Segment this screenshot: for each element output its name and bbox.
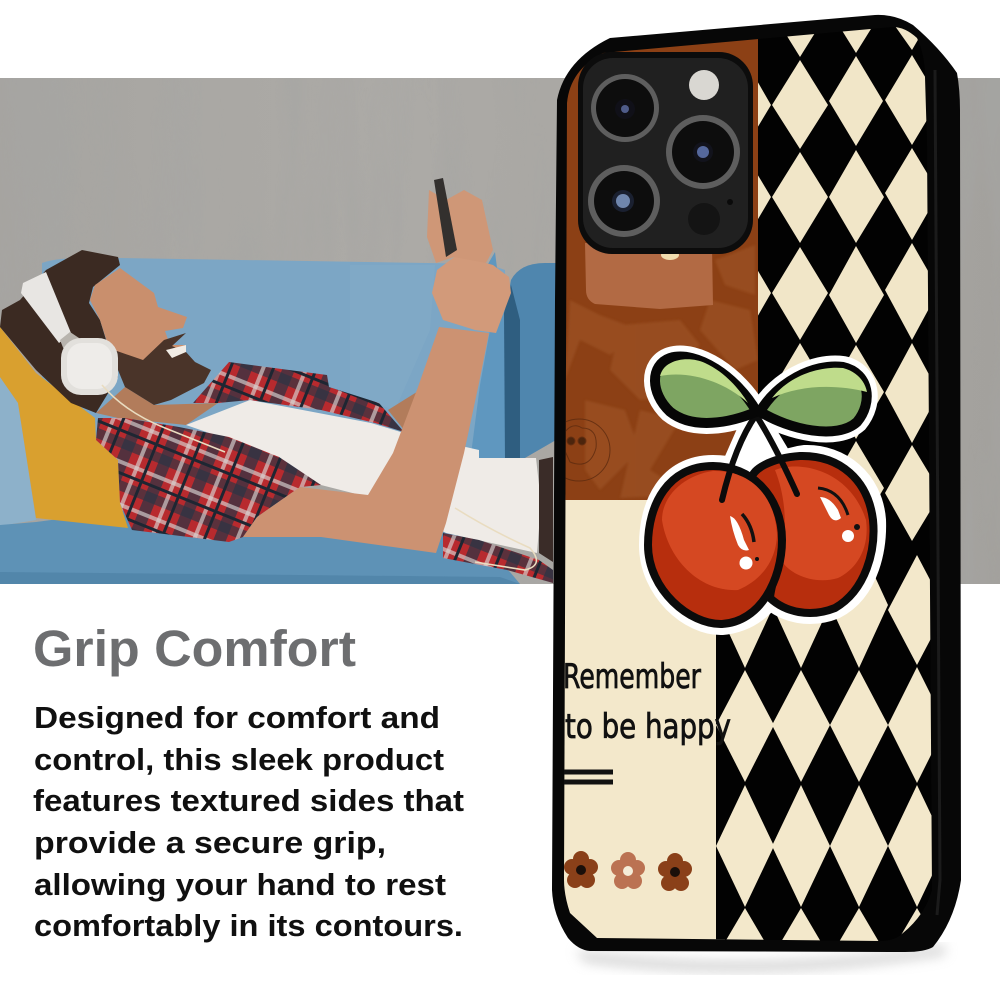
microphone [727,199,733,205]
lens right [666,115,740,189]
white t-shirt [186,400,541,553]
flowers [564,851,692,891]
body text: Designed for comfort and [34,700,440,735]
lens bottom left [588,165,660,237]
jeans [539,457,553,562]
neck [96,387,218,425]
wall background [0,78,1000,584]
white sticker outline [650,357,875,624]
body text: control, this sleek product [34,742,444,777]
stamp [566,418,610,482]
stems [722,415,797,500]
yellow pillow [0,327,128,528]
slogan: Remember [563,657,701,697]
lens top left [591,74,659,142]
flower middle [611,852,645,889]
flash [689,70,719,100]
right cherry [752,456,874,613]
slogan: to be happy [565,707,731,747]
beard [114,333,211,405]
tan patch [585,243,713,309]
case body [552,15,961,952]
flower left [564,851,598,888]
cherry illustration [648,357,875,624]
double line [564,770,613,784]
phone case [548,0,961,952]
body text: provide a secure grip, [34,825,386,860]
slogan [563,657,731,747]
body text: allowing your hand to rest [34,867,446,902]
hair [0,250,120,413]
sofa [0,252,556,584]
brown panel [560,30,758,500]
plaid shirt [96,362,553,583]
tan patch tooth [661,254,679,260]
phone shadow [575,945,945,972]
body text [33,700,464,943]
small phone [434,178,457,257]
left leaf [655,357,757,423]
far elbow [388,390,420,430]
flower right [658,853,692,891]
camera module [578,52,753,254]
smile [166,345,186,358]
arm [243,327,489,553]
right leaf [760,366,867,431]
heading: Grip Comfort [33,620,356,677]
body text: comfortably in its contours. [34,908,463,943]
body text: features textured sides that [33,783,464,818]
cream background [555,490,725,950]
harlequin pattern top [758,27,930,541]
earphone cable [102,385,536,570]
photo: man relaxing on sofa [0,78,1000,584]
side edge highlight [935,70,940,915]
headphones [21,272,118,395]
lidar [688,203,720,235]
upper hand [427,190,493,263]
harlequin pattern bottom [716,555,932,941]
face [90,268,187,362]
lower hand [432,255,511,333]
left cherry [648,466,782,624]
case screen [564,27,932,941]
